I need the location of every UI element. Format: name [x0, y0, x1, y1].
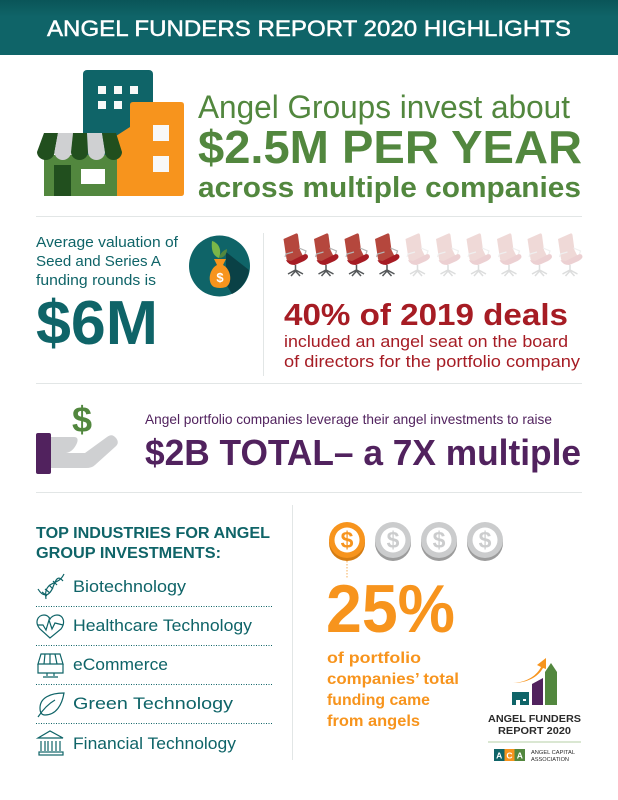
list: industries: Healthcare Technology: [73, 617, 253, 635]
list: industries: [36, 574, 273, 755]
icon: DNA: [38, 574, 64, 599]
stat: 25 percent: 25%: [326, 571, 455, 647]
text: 40% of deals: included an angel seat on the board: [284, 333, 568, 351]
icon: heart with pulse: [37, 615, 64, 638]
text: 40% of deals: [284, 297, 581, 371]
text: leverage statement: Angel portfolio companies leverage their angel investments to raise: [145, 411, 552, 427]
text: average valuation: [36, 234, 179, 358]
headline: angel groups invest: Angel Groups invest about: [198, 89, 570, 125]
icon: leaf: [38, 693, 64, 717]
icon row: ten board chairs: [284, 233, 582, 276]
text: 40% of deals: 40% of 2019 deals: [284, 297, 568, 332]
text: leverage statement: [145, 411, 581, 473]
stat: 25 percent: companies’ total: [327, 671, 459, 688]
icon: hand holding dollar: [36, 399, 118, 474]
icon: online shop monitor: [38, 654, 63, 677]
logo: angel funders report: [488, 658, 581, 763]
text: 40% of deals: of directors for the portfolio company: [284, 353, 581, 371]
text: leverage statement: $2B TOTAL– a 7X multiple: [145, 432, 581, 473]
logo: angel funders report: A: [517, 750, 523, 760]
icon: money bag with sprout: [189, 236, 250, 296]
list: industries: Financial Technology: [73, 735, 237, 753]
logo: angel funders report: ASSOCIATION: [531, 757, 569, 763]
logo: angel funders report: A: [496, 750, 502, 760]
heading: top industries: GROUP INVESTMENTS:: [36, 545, 221, 562]
logo: angel funders report: C: [506, 750, 513, 760]
headline: angel groups invest: $2.5M PER YEAR: [198, 121, 582, 173]
icon: storefront and buildings: [37, 70, 184, 196]
icon: hand holding dollar: $: [72, 399, 92, 440]
headline: angel groups invest: [198, 89, 582, 204]
header banner: ANGEL FUNDERS REPORT 2020 HIGHLIGHTS: [47, 16, 571, 41]
heading: top industries: TOP INDUSTRIES FOR ANGEL: [36, 525, 270, 542]
stat: 25 percent: of portfolio: [327, 650, 421, 667]
headline: angel groups invest: across multiple companies: [198, 172, 581, 204]
stat: 25 percent: funding came: [327, 692, 430, 709]
stat: 25 percent: [326, 571, 459, 730]
stat: 25 percent: from angels: [327, 713, 420, 730]
icon: money bag with sprout: $: [216, 270, 224, 285]
list: industries: Biotechnology: [73, 578, 187, 596]
text: average valuation: Average valuation of: [36, 234, 179, 251]
text: average valuation: $6M: [36, 289, 158, 358]
text: average valuation: funding rounds is: [36, 272, 156, 289]
list: industries: Green Technology: [73, 695, 234, 713]
header banner: [0, 0, 618, 55]
logo: angel funders report: REPORT 2020: [498, 725, 571, 737]
text: average valuation: Seed and Series A: [36, 253, 161, 270]
icon: bank building: [38, 731, 63, 755]
icon row: coins: $: [341, 527, 354, 553]
icon row: coins: [329, 522, 503, 579]
list: industries: eCommerce: [73, 656, 168, 674]
heading: top industries: [36, 525, 270, 562]
logo: angel funders report: ANGEL CAPITAL: [531, 750, 575, 756]
logo: angel funders report: ANGEL FUNDERS: [488, 713, 581, 725]
